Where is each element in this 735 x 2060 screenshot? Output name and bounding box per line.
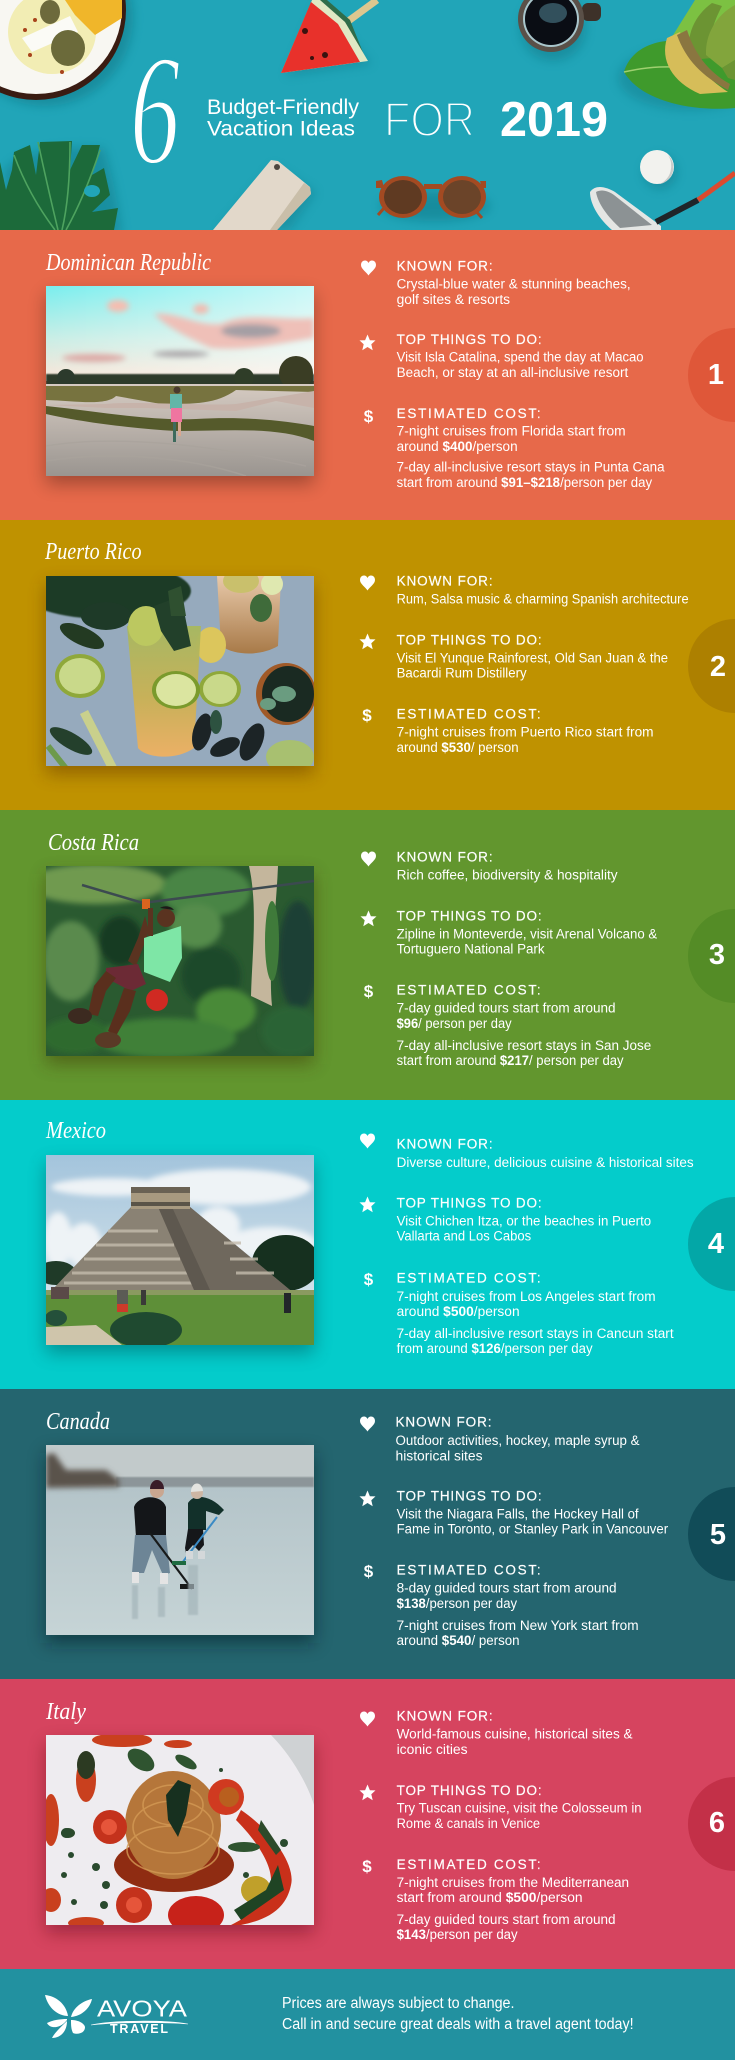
info: estimated cost: 8-day guided tours start from around — [397, 1581, 617, 1596]
photo: golf course bunker — [46, 286, 314, 484]
title: FOR: FOR — [384, 94, 475, 147]
title: 2019: 2019 — [500, 93, 608, 147]
info: estimated cost: 7-day all-inclusive resort stays in Punta Cana — [397, 460, 665, 475]
decorative photo: monstera leaf — [0, 141, 122, 235]
decorative photo: smartphone — [213, 160, 316, 230]
info: known for: Diverse culture, delicious cuisine & historical sites — [397, 1155, 694, 1170]
decorative photo: bananas on leaf — [618, 0, 735, 110]
info: known for: Rum, Salsa music & charming Spanish architecture — [397, 592, 689, 607]
info: top things to do: Fame in Toronto, or Stanley Park in Vancouver — [397, 1522, 669, 1537]
info: estimated cost — [362, 1857, 629, 1942]
heading: Canada: Canada — [46, 1409, 110, 1435]
info: top things to do — [360, 909, 657, 957]
info: top things to do — [360, 1783, 642, 1831]
info: top things to do — [360, 1196, 651, 1244]
info: top things to do: Bacardi Rum Distillery — [397, 666, 527, 681]
info: known for: KNOWN FOR: — [397, 1137, 493, 1152]
footer note: Prices are always subject to change. — [282, 1995, 514, 2012]
heading: Puerto Rico: Puerto Rico — [44, 539, 141, 565]
decorative photo: golf ball — [640, 150, 677, 189]
photo: Chichen Itza pyramid — [36, 1155, 320, 1353]
info: known for: golf sites & resorts — [397, 292, 510, 307]
panel: Dominican Republic — [0, 230, 735, 520]
info: known for: KNOWN FOR: — [397, 574, 493, 589]
info: estimated cost: $ — [364, 982, 374, 1001]
info: estimated cost: start from around $500/person — [397, 1890, 583, 1905]
info: top things to do: Try Tuscan cuisine, visit the Colosseum in — [397, 1801, 642, 1816]
info: known for: KNOWN FOR: — [397, 1709, 493, 1724]
info: top things to do: TOP THINGS TO DO: — [397, 1489, 542, 1504]
info: estimated cost: $ — [362, 1857, 372, 1876]
info: estimated cost: ESTIMATED COST: — [397, 706, 541, 721]
info: estimated cost: 7-day all-inclusive resort stays in Cancun start — [397, 1326, 674, 1341]
number badge 5 — [688, 1487, 735, 1581]
info: estimated cost — [364, 1270, 674, 1356]
info: estimated cost: 7-night cruises from New York start from — [397, 1618, 639, 1633]
info: estimated cost: around $500/person — [397, 1304, 520, 1319]
logo: Avoya Travel: AVOYA — [97, 1996, 188, 2022]
info: estimated cost: 7-day guided tours start from around — [397, 1001, 616, 1016]
number badge 4 — [688, 1197, 735, 1291]
info: estimated cost: around $540/ person — [397, 1633, 520, 1648]
info: estimated cost: $ — [362, 706, 372, 725]
info: top things to do: TOP THINGS TO DO: — [397, 1196, 542, 1211]
info: known for: KNOWN FOR: — [397, 850, 493, 865]
info: estimated cost: $138/person per day — [397, 1596, 517, 1611]
number badge 3: 3 — [709, 939, 725, 971]
info: top things to do: Beach, or stay at an all-inclusive resort — [397, 365, 628, 380]
number badge 6 — [688, 1777, 735, 1871]
info: known for: World-famous cuisine, historical sites & — [397, 1727, 633, 1742]
photo: ice hockey on a frozen lake — [46, 1445, 314, 1643]
info: known for: Outdoor activities, hockey, maple syrup & — [396, 1433, 640, 1448]
info: estimated cost: around $400/person — [397, 439, 518, 454]
info: estimated cost: 7-day all-inclusive resort stays in San Jose — [397, 1038, 651, 1053]
info: estimated cost: ESTIMATED COST: — [397, 983, 541, 998]
info: known for: Rich coffee, biodiversity & hospitality — [397, 868, 618, 883]
info: top things to do: TOP THINGS TO DO: — [397, 1783, 542, 1798]
info: top things to do: Visit Chichen Itza, or the beaches in Puerto — [397, 1214, 651, 1229]
info: top things to do: Visit the Niagara Falls, the Hockey Hall of — [397, 1507, 639, 1522]
info: known for — [360, 574, 689, 607]
info: estimated cost: start from around $217/ person per day — [397, 1053, 624, 1068]
heading: Costa Rica: Costa Rica — [48, 830, 139, 856]
info: top things to do — [360, 633, 668, 681]
title: budget-friendly vacation ideas: Budget-Friendly — [207, 96, 360, 119]
info: estimated cost: 7-night cruises from Florida start from — [397, 424, 626, 439]
info: top things to do: TOP THINGS TO DO: — [397, 332, 542, 347]
decorative photo: coffee cup — [518, 0, 601, 61]
info: top things to do: TOP THINGS TO DO: — [397, 909, 542, 924]
footer — [0, 1969, 735, 2060]
number badge 6: 6 — [709, 1807, 725, 1839]
decorative photo: sunglasses — [376, 176, 490, 221]
info: estimated cost: ESTIMATED COST: — [397, 1271, 541, 1286]
info: estimated cost: $ — [364, 407, 374, 426]
photo: zipline in the jungle — [26, 864, 321, 1064]
number badge 1: 1 — [708, 359, 724, 391]
info: known for: historical sites — [396, 1448, 483, 1463]
info: estimated cost: $96/ person per day — [397, 1016, 512, 1031]
decorative photo: watermelon slice — [281, 0, 377, 76]
info: estimated cost: 7-night cruises from Puerto Rico start from — [397, 725, 654, 740]
info: top things to do: Zipline in Monteverde, visit Arenal Volcano & — [397, 927, 657, 942]
photo: mojito cocktails — [21, 563, 316, 774]
info: estimated cost: start from around $91–$218/person per day — [397, 475, 652, 490]
heading: Italy: Italy — [45, 1699, 86, 1725]
info: estimated cost: ESTIMATED COST: — [397, 1857, 541, 1872]
info: known for — [360, 1709, 633, 1757]
info: top things to do: Tortuguero National Park — [397, 942, 545, 957]
info: estimated cost: around $530/ person — [397, 740, 519, 755]
number badge 2: 2 — [710, 651, 726, 683]
info: estimated cost — [364, 406, 665, 490]
number badge 2 — [688, 619, 735, 713]
info: estimated cost — [362, 706, 654, 755]
panel: Canada — [0, 1389, 735, 1679]
info: estimated cost — [364, 1562, 639, 1648]
title numeral 6: 6 — [130, 23, 180, 198]
info: top things to do — [360, 332, 644, 380]
number badge 1 — [688, 328, 735, 422]
info: estimated cost: from around $126/person per day — [397, 1341, 593, 1356]
info: estimated cost: 7-night cruises from Los Angeles start from — [397, 1289, 656, 1304]
title: budget-friendly vacation ideas — [207, 96, 360, 141]
decorative photo: coconut bowl — [0, 0, 133, 106]
info: known for — [361, 259, 631, 307]
info: top things to do: Rome & canals in Venice — [397, 1816, 540, 1831]
info: estimated cost: ESTIMATED COST: — [397, 406, 541, 421]
info: estimated cost: $143/person per day — [397, 1927, 518, 1942]
panel: Puerto Rico — [0, 520, 735, 810]
panel: Mexico — [0, 1100, 735, 1389]
info: estimated cost: ESTIMATED COST: — [397, 1563, 541, 1578]
info: estimated cost — [364, 982, 651, 1068]
info: known for: iconic cities — [397, 1742, 468, 1757]
heading: Mexico: Mexico — [45, 1118, 106, 1144]
info: known for: KNOWN FOR: — [396, 1415, 492, 1430]
number badge 5: 5 — [710, 1519, 726, 1551]
info: top things to do — [360, 1489, 669, 1537]
info: top things to do: Visit Isla Catalina, spend the day at Macao — [397, 350, 644, 365]
info: known for — [361, 850, 618, 883]
number badge 4: 4 — [708, 1228, 724, 1260]
logo: Avoya Travel — [45, 1995, 188, 2038]
info: estimated cost: $ — [364, 1562, 374, 1581]
footer note: Call in and secure great deals with a travel agent today! — [282, 2016, 634, 2033]
info: top things to do: Vallarta and Los Cabos — [397, 1229, 531, 1244]
info: top things to do: Visit El Yunque Rainforest, Old San Juan & the — [397, 650, 668, 665]
info: known for: KNOWN FOR: — [397, 259, 493, 274]
footer note — [282, 1995, 634, 2033]
panel: Costa Rica — [0, 810, 735, 1100]
info: estimated cost: 7-day guided tours start from around — [397, 1912, 616, 1927]
info: estimated cost: $ — [364, 1270, 374, 1289]
info: known for — [360, 1134, 694, 1170]
number badge 3 — [688, 909, 735, 1003]
logo: Avoya Travel: TRAVEL — [110, 2022, 168, 2036]
photo: plated spaghetti — [41, 1733, 314, 1934]
title: budget-friendly vacation ideas: Vacation Ideas — [207, 118, 355, 141]
decorative photo: golf club — [590, 173, 735, 230]
info: known for — [360, 1415, 640, 1463]
info: top things to do: TOP THINGS TO DO: — [397, 633, 542, 648]
info: known for: Crystal-blue water & stunning beaches, — [397, 277, 631, 292]
panel: Italy — [0, 1679, 735, 1969]
hero banner — [0, 0, 735, 235]
heading: Dominican Republic: Dominican Republic — [45, 250, 211, 276]
info: estimated cost: 7-night cruises from the Mediterranean — [397, 1875, 629, 1890]
